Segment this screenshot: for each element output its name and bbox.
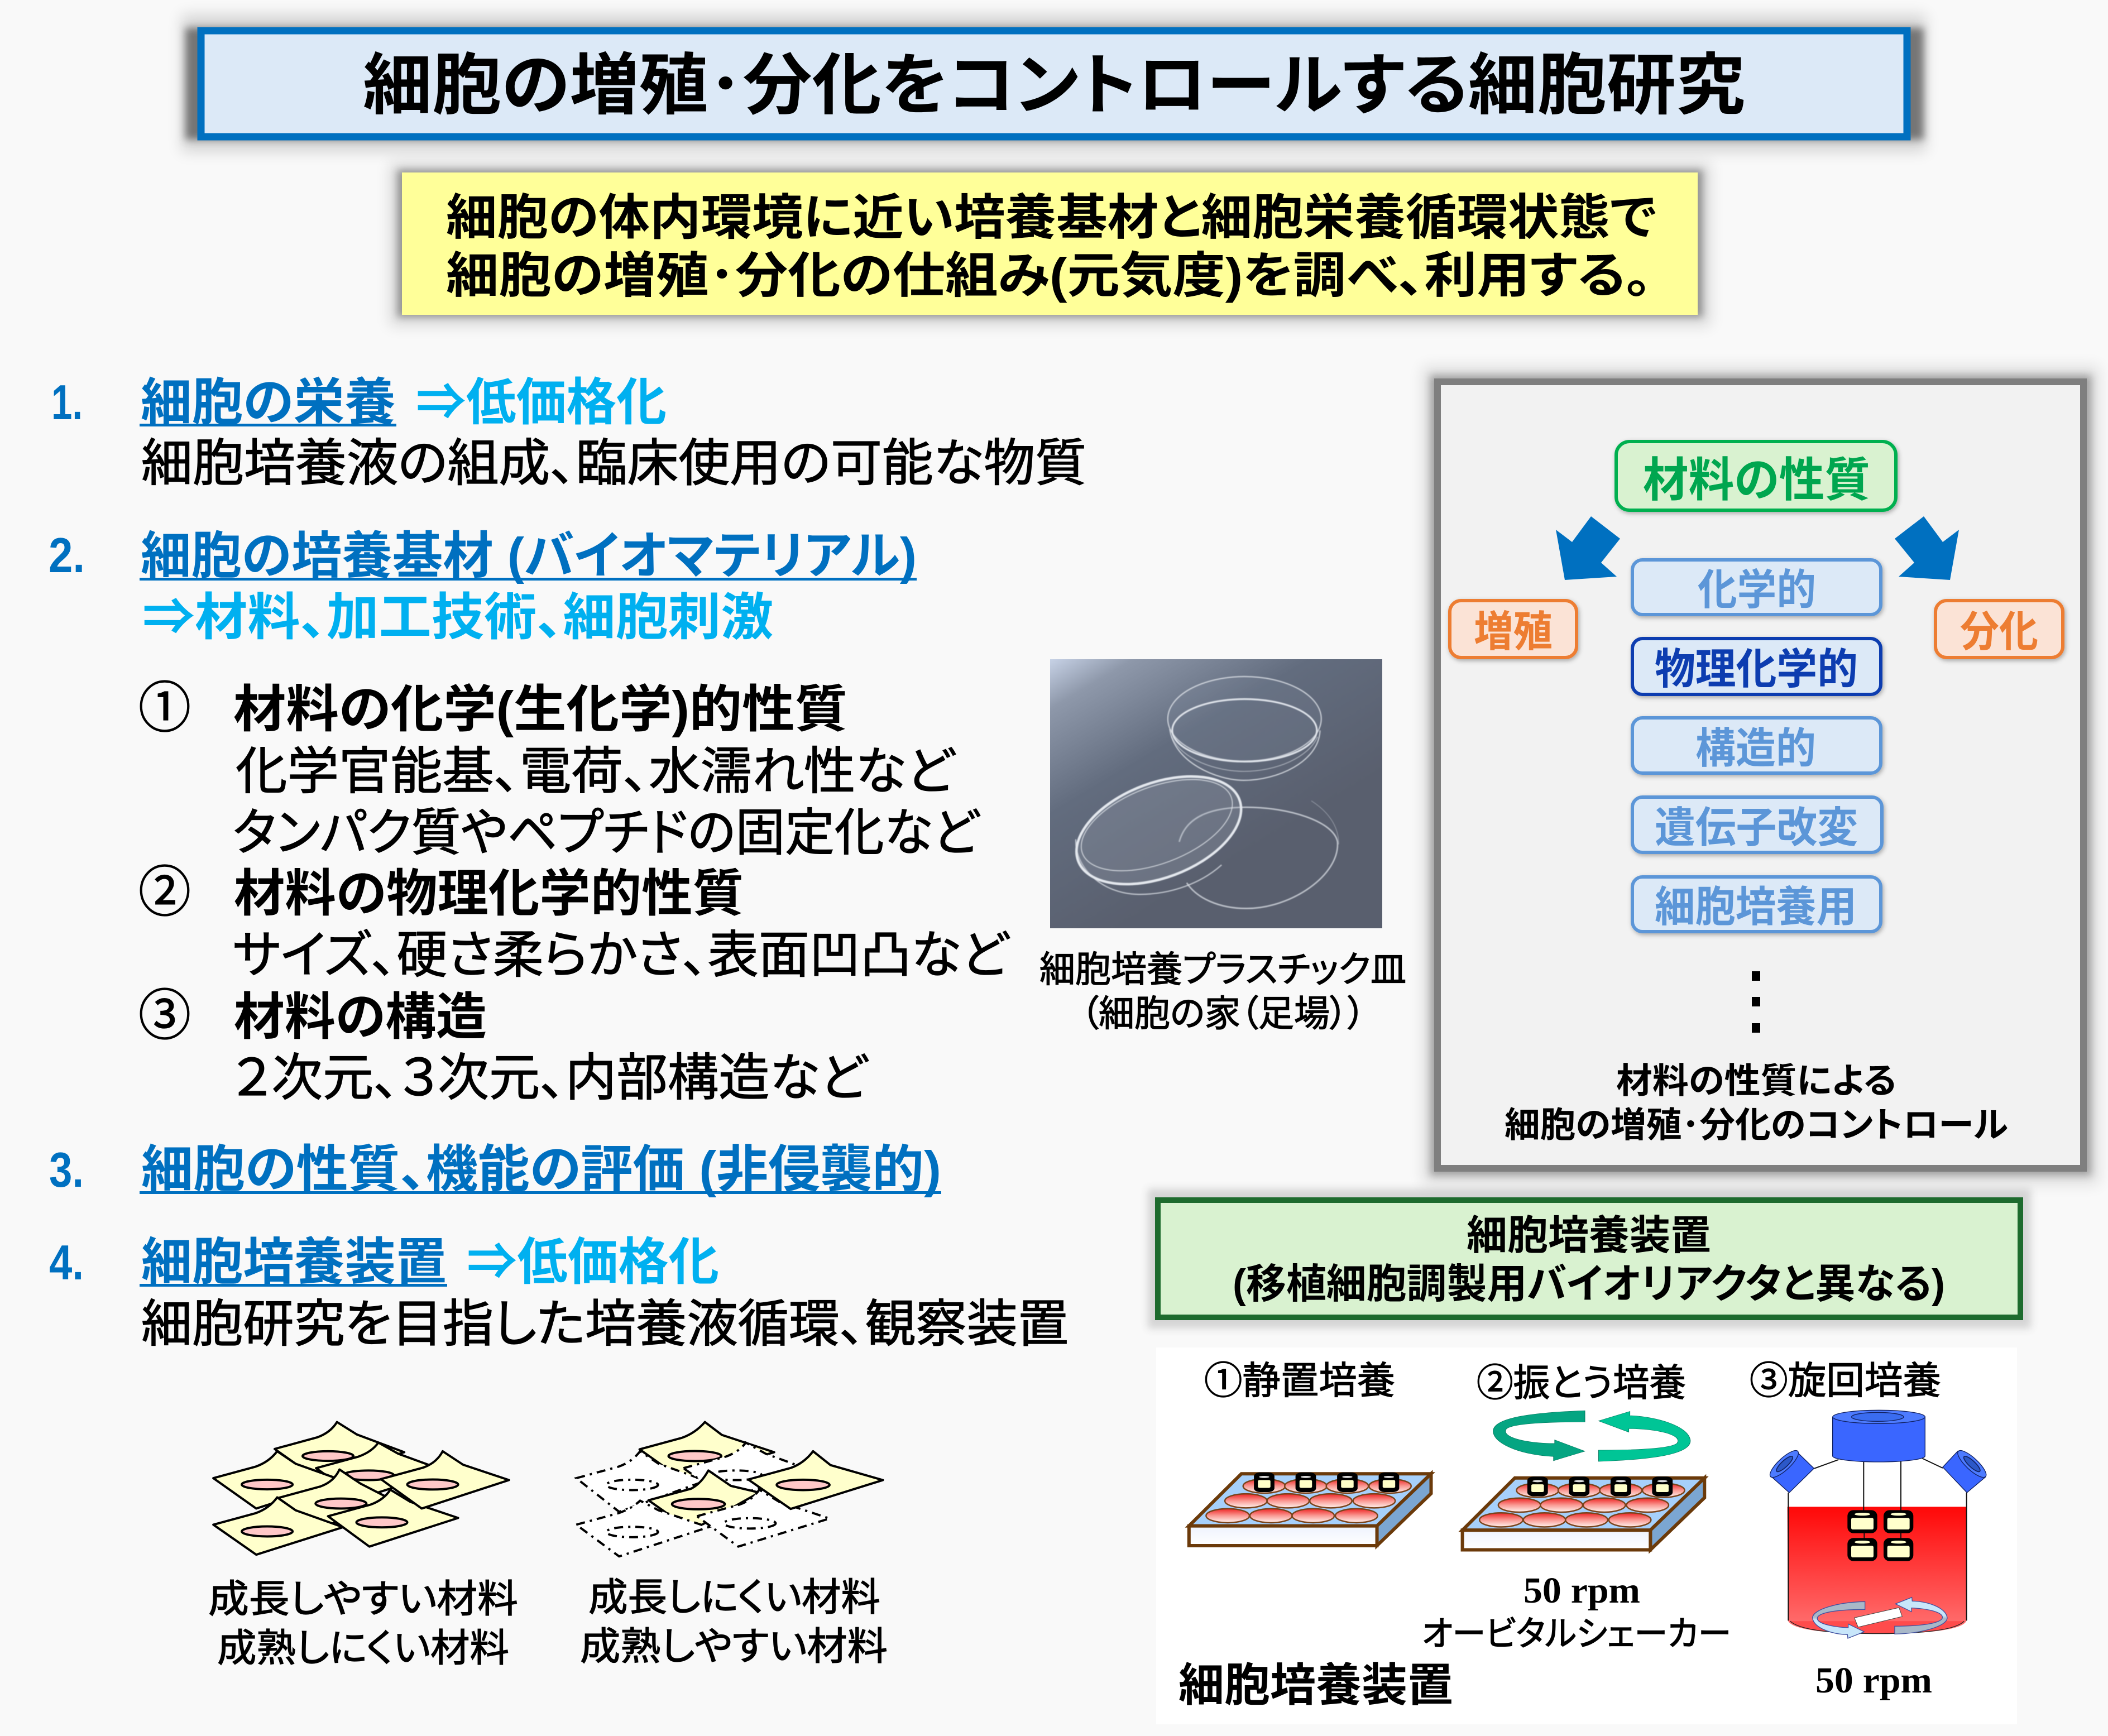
sub-list: material properties: タンパク質やペプチドの固定化など bbox=[233, 805, 980, 861]
diagram: cells on growth-resistant material bbox=[576, 1422, 883, 1556]
item 1: nutrition: 細胞培養液の組成、臨床使用の可能な物質 bbox=[141, 435, 1086, 492]
box: chemical: 化学的 bbox=[1698, 567, 1816, 614]
item 3: evaluation: 細胞の性質、機能の評価 (非侵襲的) bbox=[141, 1142, 941, 1198]
sub-list: material properties: ③ bbox=[138, 985, 191, 1046]
sub-list: material properties: 化学官能基、電荷、水濡れ性など bbox=[236, 744, 956, 800]
label: shaker speed: 50 rpm bbox=[1523, 1570, 1640, 1611]
caption: growth-resistant material bbox=[580, 1576, 888, 1668]
label: orbital shaker: オービタルシェーカー bbox=[1422, 1615, 1731, 1653]
item 2: culture substrate: ⇒材料、加工技術、細胞刺激 bbox=[142, 589, 773, 646]
caption: plastic dish: （細胞の家（足場）） bbox=[1081, 993, 1366, 1034]
title bbox=[181, 15, 1926, 152]
callout: summary bbox=[390, 163, 1711, 326]
label: shaking culture: ②振とう培養 bbox=[1477, 1362, 1686, 1404]
sub-list: material properties: 材料の化学(生化学)的性質 bbox=[233, 682, 847, 738]
caption: growth-friendly material bbox=[208, 1577, 518, 1670]
panel caption: 細胞の増殖･分化のコントロール bbox=[1505, 1106, 2008, 1145]
caption: growth-resistant material: 成熟しやすい材料 bbox=[580, 1625, 888, 1668]
box: gene modification: 遺伝子改変 bbox=[1655, 804, 1858, 852]
sub-list: material properties: サイズ、硬さ柔らかさ、表面凹凸など bbox=[233, 927, 1010, 984]
heading: culture device: 細胞培養装置 bbox=[1467, 1213, 1711, 1258]
well plate: static bbox=[1189, 1473, 1431, 1546]
item 2: culture substrate: 2. bbox=[49, 527, 85, 583]
item 1: nutrition bbox=[51, 375, 1086, 492]
box: proliferation: 増殖 bbox=[1474, 608, 1553, 656]
box: physicochemical: 物理化学的 bbox=[1655, 646, 1858, 693]
item 2: culture substrate: 細胞の培養基材 (バイオマテリアル) bbox=[141, 528, 917, 584]
sub-list: material properties bbox=[138, 677, 1010, 1106]
heading: culture device bbox=[1148, 1189, 2031, 1329]
box: structural: 構造的 bbox=[1695, 725, 1816, 773]
item 4: culture device: ⇒低価格化 bbox=[467, 1234, 719, 1291]
callout: summary: 細胞の体内環境に近い培養基材と細胞栄養循環状態で bbox=[446, 190, 1656, 245]
panel: material properties control bbox=[1422, 366, 2099, 1184]
callout: summary: 細胞の増殖･分化の仕組み(元気度)を調べ、利用する。 bbox=[446, 248, 1652, 303]
sub-list: material properties: 材料の構造 bbox=[234, 989, 487, 1046]
arrow: right to differentiation bbox=[1895, 516, 1959, 580]
caption: plastic dish bbox=[1039, 949, 1406, 1034]
item 4: culture device: 4. bbox=[49, 1235, 84, 1290]
box: chemical bbox=[1632, 560, 1881, 615]
sub-list: material properties: ② bbox=[138, 861, 191, 923]
sub-list: material properties: 材料の物理化学的性質 bbox=[234, 866, 744, 922]
flask: rotary bioreactor bbox=[1766, 1410, 1990, 1638]
item 1: nutrition: 1. bbox=[51, 375, 83, 430]
item 4: culture device bbox=[49, 1234, 1069, 1353]
item 2: culture substrate bbox=[49, 527, 917, 646]
item 4: culture device: 細胞培養装置 bbox=[141, 1234, 447, 1291]
box: differentiation bbox=[1935, 601, 2063, 658]
caption: growth-friendly material: 成長しやすい材料 bbox=[208, 1577, 518, 1620]
caption: plastic dish: 細胞培養プラスチック皿 bbox=[1039, 949, 1406, 990]
sub-list: material properties: ① bbox=[138, 677, 191, 738]
item 3: evaluation: 3. bbox=[49, 1142, 84, 1197]
label: material properties bbox=[1616, 442, 1896, 510]
diagram: cells on growth-friendly material bbox=[213, 1422, 509, 1555]
continuation dots bbox=[1752, 971, 1760, 1033]
panel caption bbox=[1505, 1062, 2008, 1145]
arrow: left to proliferation bbox=[1556, 516, 1620, 580]
panel: culture methods bbox=[1156, 1347, 2017, 1724]
box: for cell culture: 細胞培養用 bbox=[1655, 884, 1857, 931]
caption: growth-friendly material: 成熟しにくい材料 bbox=[217, 1627, 509, 1670]
arrows: shaking rotation bbox=[1493, 1411, 1690, 1461]
label: device caption: 細胞培養装置 bbox=[1178, 1660, 1453, 1711]
label: static culture: ①静置培養 bbox=[1204, 1360, 1395, 1402]
caption: growth-resistant material: 成長しにくい材料 bbox=[588, 1576, 880, 1619]
box: proliferation bbox=[1450, 601, 1577, 658]
title: 細胞の増殖･分化をコントロールする細胞研究 bbox=[363, 48, 1745, 123]
sub-list: material properties: ２次元、３次元、内部構造など bbox=[233, 1050, 869, 1106]
item 1: nutrition: ⇒低価格化 bbox=[416, 375, 667, 431]
heading: culture device: (移植細胞調製用バイオリアクタと異なる) bbox=[1233, 1262, 1945, 1307]
panel caption: 材料の性質による bbox=[1616, 1062, 1896, 1101]
item 1: nutrition: 細胞の栄養 bbox=[141, 375, 396, 431]
well plate: shaking bbox=[1463, 1476, 1704, 1550]
label: flask speed: 50 rpm bbox=[1815, 1660, 1932, 1701]
label: material properties: 材料の性質 bbox=[1643, 454, 1870, 506]
box: structural bbox=[1632, 718, 1881, 773]
box: differentiation: 分化 bbox=[1960, 608, 2038, 656]
item 4: culture device: 細胞研究を目指した培養液循環、観察装置 bbox=[141, 1296, 1069, 1353]
photo: plastic culture dishes bbox=[1050, 659, 1382, 928]
label: rotary culture: ③旋回培養 bbox=[1750, 1360, 1941, 1402]
